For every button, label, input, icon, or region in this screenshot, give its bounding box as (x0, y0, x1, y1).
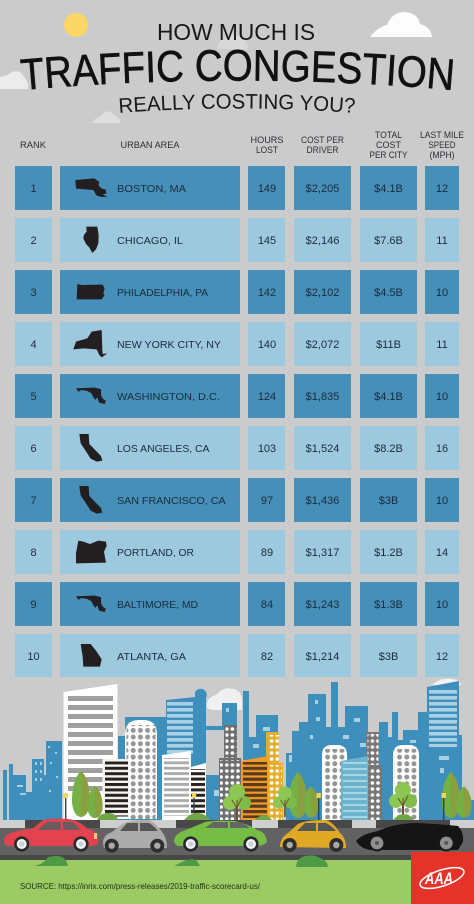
row 1: Boston (15, 166, 459, 210)
car: black (356, 823, 463, 851)
row 2: Chicago: 11 (436, 235, 448, 247)
grass (0, 860, 474, 904)
car: green (174, 821, 267, 852)
cloud behind right tower (432, 679, 461, 685)
row 8: Portland: PORTLAND, OR (117, 547, 194, 559)
title: HOW MUCH IS (157, 19, 315, 45)
cloud: center behind title (217, 35, 248, 49)
row 2: Chicago: 145 (258, 235, 276, 247)
row 4: New York City: $11B (376, 339, 401, 351)
row 1: Boston: BOSTON, MA (117, 183, 186, 195)
row 4: New York City: 4 (30, 339, 37, 351)
title (20, 19, 454, 113)
blue skyline: left (3, 741, 62, 820)
row 3: Philadelphia: PHILADELPHIA, PA (117, 287, 208, 299)
table header: LAST MILE (420, 130, 464, 141)
row 9: Baltimore: $1.3B (374, 599, 403, 611)
orange building (241, 756, 268, 820)
row 5: Washington: 124 (258, 391, 276, 403)
window details on blue skyline (17, 700, 449, 796)
black striped building (102, 759, 130, 819)
row 10: Atlanta: 10 (27, 651, 40, 663)
row 2: Chicago: CHICAGO, IL (117, 235, 183, 247)
trees (72, 771, 472, 820)
table header: DRIVER (306, 145, 339, 156)
row 7: San Francisco: 10 (436, 495, 448, 507)
row 7: San Francisco: $3B (379, 495, 398, 507)
striped blue tower: center (167, 702, 193, 754)
table header: COST PER (301, 135, 344, 146)
table header: SPEED (428, 140, 456, 151)
row 9: Baltimore: 9 (30, 599, 37, 611)
city illustration (0, 679, 474, 904)
icon: Maryland (76, 388, 106, 404)
row 10: Atlanta: 82 (261, 651, 273, 663)
road (0, 828, 474, 860)
icon: sun (64, 13, 88, 37)
icon: New York (73, 330, 107, 357)
row 6: Los Angeles: $1,524 (306, 443, 339, 455)
AAA logo box (411, 852, 474, 904)
row 5: Washington: 10 (436, 391, 448, 403)
white round towers: right (322, 745, 347, 820)
sidewalk bushes (97, 813, 414, 820)
row 4: New York City: 11 (436, 339, 448, 351)
striped blue tower: right (429, 689, 457, 747)
row 3: Philadelphia: 3 (30, 287, 37, 299)
icon: Massachusetts (75, 178, 107, 197)
blue skyline: right (286, 681, 474, 820)
car: gray (103, 820, 167, 853)
cloud: small lower left (92, 111, 121, 123)
row 3: Philadelphia: $4.5B (374, 287, 403, 299)
row 3: Philadelphia: $2,102 (306, 287, 339, 299)
row 1: Boston: $4.1B (374, 183, 403, 195)
row 3: Philadelphia: 10 (436, 287, 448, 299)
gray tower: right (366, 732, 379, 766)
table header: COST (376, 140, 401, 151)
table header: HOURS (250, 135, 284, 146)
row 6: Los Angeles: LOS ANGELES, CA (117, 443, 210, 455)
row 2: Chicago: $2,146 (306, 235, 339, 247)
source line: SOURCE: https://inrix.com/press-releases/2019-traffic-scorecard-us/ (20, 881, 261, 891)
black striped building 2 (191, 763, 206, 820)
row 8: Portland: $1,317 (306, 547, 339, 559)
road edge (0, 855, 474, 860)
row 8: Portland (15, 530, 459, 574)
row 4: New York City (15, 322, 459, 366)
bridge and center blue towers (206, 691, 278, 760)
row 2: Chicago: 2 (30, 235, 37, 247)
table header: RANK (20, 140, 47, 151)
icon: Georgia (81, 644, 102, 667)
row 9: Baltimore: $1,243 (306, 599, 339, 611)
white round tower with dots (125, 720, 157, 819)
table header (20, 130, 464, 161)
row 1: Boston: $2,205 (306, 183, 339, 195)
row 3: Philadelphia: 142 (258, 287, 276, 299)
row 8: Portland: 14 (436, 547, 448, 559)
blue skyline: center (118, 689, 220, 820)
row 7: San Francisco: 7 (30, 495, 37, 507)
icon: Illinois (83, 227, 99, 253)
row 6: Los Angeles: 16 (436, 443, 448, 455)
row 9: Baltimore: 84 (261, 599, 273, 611)
row 8: Portland: 8 (30, 547, 37, 559)
white tall building (64, 684, 118, 820)
table header: TOTAL (375, 130, 403, 141)
row 6: Los Angeles (15, 426, 459, 470)
row 8: Portland: 89 (261, 547, 273, 559)
row 4: New York City: NEW YORK CITY, NY (117, 339, 221, 351)
row 6: Los Angeles: 6 (30, 443, 37, 455)
table header: URBAN AREA (120, 140, 180, 151)
row 7: San Francisco (15, 478, 459, 522)
table header: PER CITY (370, 150, 408, 161)
row 3: Philadelphia (15, 270, 459, 314)
row 10: Atlanta: $1,214 (306, 651, 339, 663)
row 6: Los Angeles: $8.2B (374, 443, 403, 455)
yellow building (266, 732, 283, 820)
row 1: Boston: 12 (436, 183, 448, 195)
sidewalk (0, 820, 474, 828)
table header: (MPH) (430, 150, 454, 161)
cloud: left (0, 71, 28, 89)
row 5: Washington: 5 (30, 391, 37, 403)
row 5: Washington: $1,835 (306, 391, 339, 403)
row 9: Baltimore: 10 (436, 599, 448, 611)
row 5: Washington: $4.1B (374, 391, 403, 403)
icon: Pennsylvania (77, 284, 105, 299)
row 6: Los Angeles: 103 (258, 443, 276, 455)
row 10: Atlanta: ATLANTA, GA (117, 651, 186, 663)
title: REALLY COSTING YOU? (120, 94, 355, 113)
row 2: Chicago (15, 218, 459, 262)
icon: Oregon (76, 541, 107, 563)
row 10: Atlanta: 12 (436, 651, 448, 663)
roadside bushes (34, 855, 328, 867)
icon: Maryland (76, 596, 106, 612)
cloud behind skyline (207, 688, 242, 710)
row 10: Atlanta (15, 634, 459, 677)
white striped building (162, 751, 191, 820)
row 2: Chicago: $7.6B (374, 235, 403, 247)
car: red (4, 819, 98, 852)
row 5: Washington: WASHINGTON, D.C. (117, 391, 220, 403)
row 7: San Francisco: 97 (261, 495, 273, 507)
row 10: Atlanta: $3B (379, 651, 398, 663)
cloud: top right (370, 12, 432, 37)
icon: California (79, 486, 102, 514)
AAA logo: AAA (424, 869, 453, 888)
row 1: Boston: 149 (258, 183, 276, 195)
car: yellow (280, 820, 346, 852)
row 8: Portland: $1.2B (374, 547, 403, 559)
table header: LOST (256, 145, 278, 156)
row 7: San Francisco: SAN FRANCISCO, CA (117, 495, 226, 507)
row 4: New York City: $2,072 (306, 339, 339, 351)
row 4: New York City: 140 (258, 339, 276, 351)
teal building (341, 756, 368, 820)
row 5: Washington (15, 374, 459, 418)
row 1: Boston: 1 (30, 183, 37, 195)
row 9: Baltimore: BALTIMORE, MD (117, 599, 198, 611)
icon: California (79, 434, 102, 462)
row 7: San Francisco: $1,436 (306, 495, 339, 507)
lamp posts (63, 793, 446, 820)
row 9: Baltimore (15, 582, 459, 626)
title: TRAFFIC CONGESTION (20, 50, 454, 90)
gray towers with windows (224, 725, 237, 761)
